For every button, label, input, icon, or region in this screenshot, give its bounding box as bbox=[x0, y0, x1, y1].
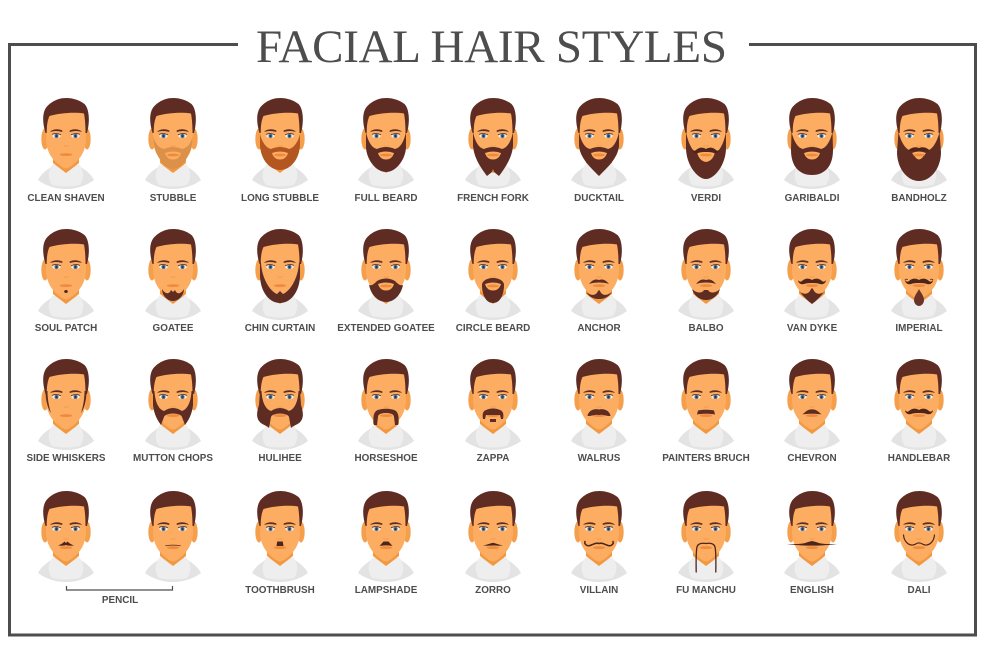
label: anchor: ANCHOR bbox=[577, 323, 621, 334]
portrait: painters brush bbox=[662, 359, 750, 464]
label: painters brush: PAINTERS BRUCH bbox=[662, 453, 750, 464]
beard: chin curtain bbox=[260, 261, 300, 303]
portrait: circle beard bbox=[456, 229, 530, 334]
label: toothbrush: TOOTHBRUSH bbox=[245, 585, 315, 596]
moustache: villain bbox=[585, 542, 613, 546]
label: circle beard: CIRCLE BEARD bbox=[456, 323, 530, 334]
label: extended goatee: EXTENDED GOATEE bbox=[337, 323, 435, 334]
label: mutton chops: MUTTON CHOPS bbox=[133, 453, 213, 464]
moustache: zappa bbox=[483, 408, 503, 422]
beard: french fork bbox=[473, 132, 513, 176]
portrait: lampshade bbox=[355, 491, 418, 596]
label: ducktail: DUCKTAIL bbox=[574, 193, 624, 204]
bracket and label: pencil: PENCIL bbox=[102, 595, 138, 606]
moustache: fu manchu bbox=[696, 543, 716, 572]
beard: garibaldi bbox=[791, 132, 833, 175]
label: zorro: ZORRO bbox=[475, 585, 511, 596]
moustache: painters brush bbox=[697, 410, 715, 414]
portrait: fu manchu bbox=[676, 491, 736, 596]
label: english: ENGLISH bbox=[790, 585, 834, 596]
portrait: full beard bbox=[355, 98, 417, 204]
moustache and beard: van dyke bbox=[798, 279, 826, 304]
label: verdi: VERDI bbox=[691, 193, 721, 204]
title: FACIAL HAIR STYLES bbox=[256, 21, 727, 73]
beard: stubble bbox=[154, 136, 192, 169]
label: chevron: CHEVRON bbox=[787, 453, 837, 464]
portrait: villain bbox=[571, 491, 627, 596]
label: zappa: ZAPPA bbox=[477, 453, 509, 464]
moustache: handlebar bbox=[905, 409, 933, 414]
label: garibaldi: GARIBALDI bbox=[785, 193, 840, 204]
portrait: mutton chops bbox=[133, 359, 213, 464]
moustache: toothbrush bbox=[276, 542, 284, 546]
portrait: handlebar bbox=[888, 359, 950, 464]
beard: verdi bbox=[686, 132, 726, 179]
portrait: van dyke bbox=[784, 229, 840, 334]
portrait: horseshoe bbox=[354, 359, 418, 464]
moustache and beard: imperial bbox=[905, 279, 933, 306]
label: french fork: FRENCH FORK bbox=[457, 193, 530, 204]
label: soul patch: SOUL PATCH bbox=[35, 323, 97, 334]
label: side whiskers: SIDE WHISKERS bbox=[26, 453, 106, 464]
beard: goatee bbox=[162, 289, 184, 301]
portrait: soul patch bbox=[35, 229, 97, 334]
portrait: goatee bbox=[145, 229, 201, 334]
label: clean shaven: CLEAN SHAVEN bbox=[27, 193, 105, 204]
moustache and beard: balbo bbox=[692, 279, 720, 300]
portrait: ducktail bbox=[571, 98, 627, 204]
beard: bandholz bbox=[897, 132, 941, 181]
label: full beard: FULL BEARD bbox=[355, 193, 417, 204]
label: bandholz: BANDHOLZ bbox=[891, 193, 947, 204]
portrait: dali bbox=[891, 491, 947, 596]
portrait: imperial bbox=[891, 229, 947, 334]
portrait: long stubble bbox=[241, 98, 319, 204]
label: handlebar: HANDLEBAR bbox=[888, 453, 950, 464]
portrait: chin curtain bbox=[245, 229, 315, 334]
label: fu manchu: FU MANCHU bbox=[676, 585, 736, 596]
moustache: english bbox=[787, 541, 837, 546]
label: walrus: WALRUS bbox=[578, 453, 621, 464]
label: villain: VILLAIN bbox=[580, 585, 618, 596]
beard: full bbox=[366, 132, 406, 172]
beard: extended goatee bbox=[369, 278, 403, 302]
moustache and beard: anchor bbox=[586, 279, 612, 299]
bracket and label: pencil bbox=[66, 586, 172, 606]
portrait: pencil two bbox=[145, 491, 201, 582]
label: lampshade: LAMPSHADE bbox=[355, 585, 418, 596]
moustache: pencil one bbox=[58, 542, 74, 546]
portrait: verdi bbox=[678, 98, 734, 204]
beard: soul patch bbox=[64, 290, 68, 293]
portrait: zappa bbox=[465, 359, 521, 464]
label: goatee: GOATEE bbox=[153, 323, 194, 334]
label: chin curtain: CHIN CURTAIN bbox=[245, 323, 315, 334]
portrait: french fork bbox=[457, 98, 530, 204]
moustache: lampshade bbox=[380, 542, 392, 546]
label: stubble: STUBBLE bbox=[150, 193, 197, 204]
portrait: garibaldi bbox=[784, 98, 840, 204]
label: van dyke: VAN DYKE bbox=[787, 323, 838, 334]
portrait: anchor bbox=[571, 229, 627, 334]
portrait: bandholz bbox=[891, 98, 947, 204]
portrait: extended goatee bbox=[337, 229, 435, 334]
beard: mutton chops bbox=[153, 391, 193, 425]
beard: long stubble bbox=[260, 134, 300, 170]
portrait: walrus bbox=[571, 359, 627, 464]
portrait: stubble bbox=[145, 98, 201, 204]
portrait: side whiskers bbox=[26, 359, 106, 464]
portrait: zorro bbox=[465, 491, 521, 596]
portrait: clean shaven bbox=[27, 98, 105, 204]
label: long stubble: LONG STUBBLE bbox=[241, 193, 319, 204]
portrait: toothbrush bbox=[245, 491, 315, 596]
beard: circle beard bbox=[482, 278, 504, 303]
label: balbo: BALBO bbox=[688, 323, 724, 334]
beard: hulihee bbox=[257, 391, 303, 428]
label: dali: DALI bbox=[907, 585, 931, 596]
moustache: chevron bbox=[802, 409, 822, 414]
portrait: english bbox=[784, 491, 840, 596]
sideburns: side whiskers bbox=[46, 391, 86, 413]
moustache: walrus bbox=[588, 409, 610, 416]
moustache: zorro bbox=[483, 543, 503, 546]
label: hulihee: HULIHEE bbox=[258, 453, 302, 464]
portrait: balbo bbox=[678, 229, 734, 334]
beard: ducktail bbox=[579, 132, 619, 176]
moustache: horseshoe bbox=[373, 409, 399, 425]
portrait: hulihee bbox=[252, 359, 308, 464]
moustache: pencil two bbox=[166, 544, 180, 547]
portrait: pencil one bbox=[38, 491, 94, 582]
portrait: chevron bbox=[784, 359, 840, 464]
label: imperial: IMPERIAL bbox=[895, 323, 943, 334]
moustache: dali bbox=[904, 535, 934, 545]
label: horseshoe: HORSESHOE bbox=[354, 453, 418, 464]
